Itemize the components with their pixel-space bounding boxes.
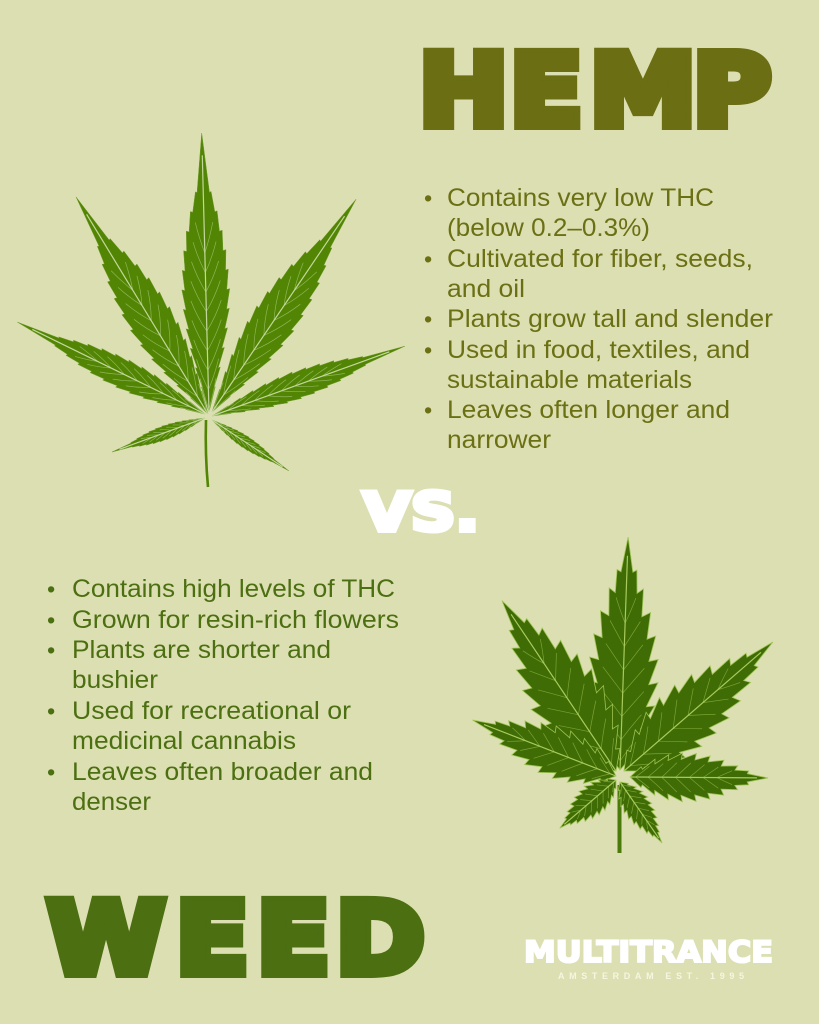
text block: weed facts: • <box>47 607 55 633</box>
weed leaflet: far left <box>463 696 625 800</box>
hemp leaflet: upper right <box>193 187 375 425</box>
hemp leaflet: lower left <box>110 411 208 459</box>
text block: hemp facts: • <box>424 246 432 272</box>
text block: weed facts: • <box>47 698 55 724</box>
heading: VS.: VS. <box>363 482 479 544</box>
icon: hemp leaf <box>11 132 410 487</box>
text block: hemp facts: • <box>424 337 432 363</box>
text block: hemp facts: • <box>424 185 432 211</box>
hemp leaflet: upper left <box>56 185 228 426</box>
text block: weed facts: • <box>47 637 55 663</box>
icon: weed leaf <box>463 536 794 853</box>
text block: weed facts: • <box>47 576 55 602</box>
text block: weed facts: Contains high levels of THC <box>72 575 395 603</box>
text block: weed facts: Leaves often broader and <box>72 758 373 786</box>
weed leaflet: lower left <box>549 768 626 840</box>
text block: hemp facts: Cultivated for fiber, seeds, <box>447 245 753 273</box>
text block: hemp facts: and oil <box>447 275 525 303</box>
hemp leaflet: lower right <box>209 415 292 476</box>
hemp leaf stem <box>206 420 208 487</box>
text block: weed facts: Used for recreational or <box>72 697 351 725</box>
logo tagline: AMSTERDAM EST. 1995 <box>558 971 744 981</box>
hemp leaflet: far left <box>11 309 212 428</box>
heading: HEMP: HEMP <box>419 34 771 149</box>
text block: hemp facts <box>424 184 773 454</box>
weed leaflet: far right <box>630 753 768 802</box>
text block: hemp facts: • <box>424 397 432 423</box>
text block: weed facts: Grown for resin-rich flowers <box>72 606 399 634</box>
text block: hemp facts: • <box>424 306 432 332</box>
text block: weed facts: • <box>47 759 55 785</box>
text block: hemp facts: Plants grow tall and slender <box>447 305 773 333</box>
text block: hemp facts: Used in food, textiles, and <box>447 336 750 364</box>
hemp leaflet: far right <box>207 333 410 429</box>
text block: hemp facts: narrower <box>447 426 551 454</box>
logo: Multitrance <box>524 935 773 981</box>
text block: weed facts: denser <box>72 788 151 816</box>
text block: hemp facts: sustainable materials <box>447 366 692 394</box>
weed leaflet: top <box>585 536 663 771</box>
logo wordmark: MULTITRANCE <box>524 935 773 969</box>
text block: weed facts: bushier <box>72 666 158 694</box>
text block: weed facts <box>47 575 399 816</box>
weed leaflet: upper right <box>603 618 794 795</box>
text block: weed facts: medicinal cannabis <box>72 727 296 755</box>
text block: hemp facts: (below 0.2–0.3%) <box>447 214 650 242</box>
weed leaflet: lower right <box>608 774 674 851</box>
hemp leaflet: top <box>178 132 233 413</box>
weed leaflet: upper left <box>471 580 647 792</box>
weed leaf stem <box>618 785 622 853</box>
text block: weed facts: Plants are shorter and <box>72 636 331 664</box>
heading: WEED: WEED <box>47 882 425 997</box>
text block: hemp facts: Contains very low THC <box>447 184 714 212</box>
text block: hemp facts: Leaves often longer and <box>447 396 730 424</box>
